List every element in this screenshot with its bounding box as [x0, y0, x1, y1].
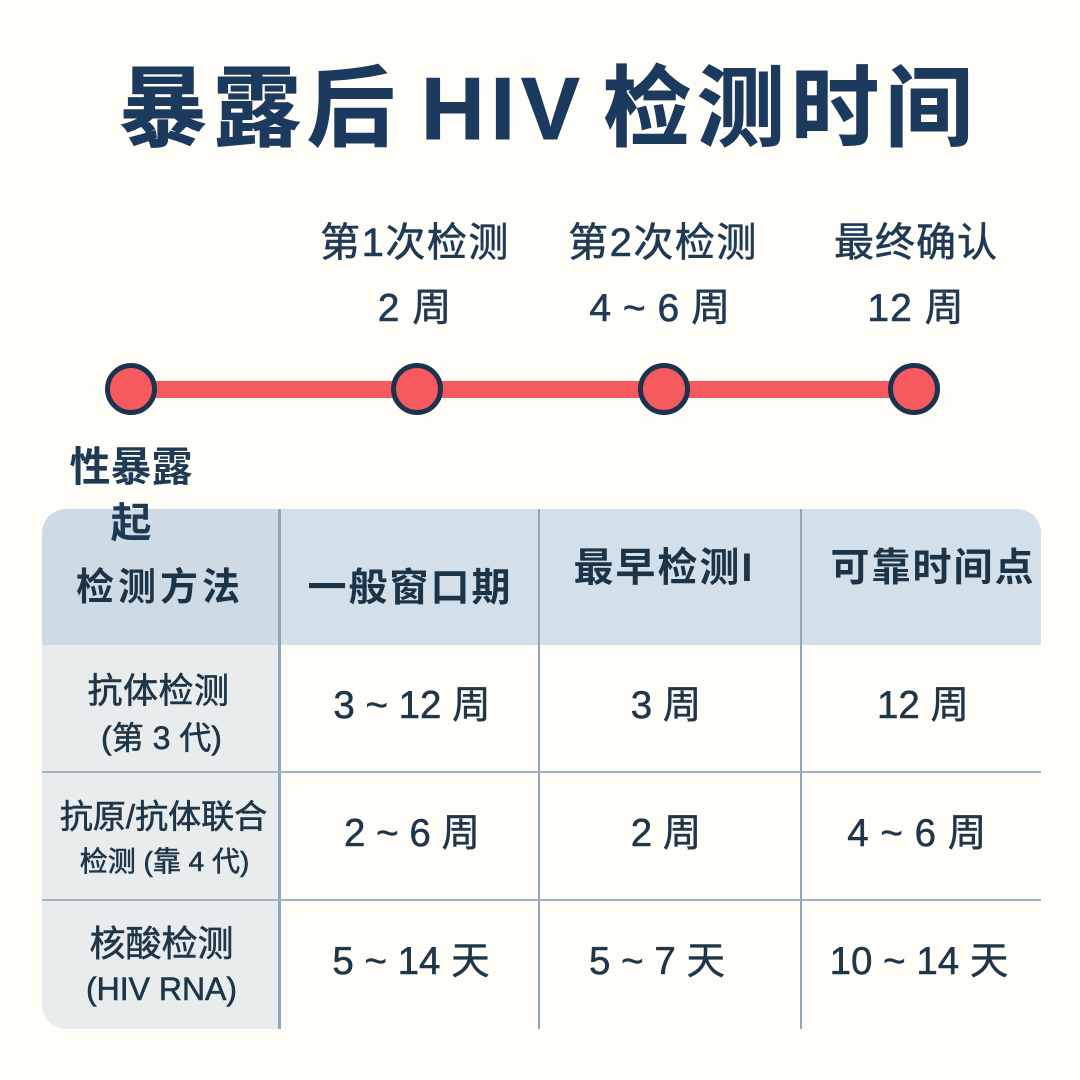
method label: 抗原/抗体联合	[60, 798, 267, 835]
timeline value: first test: 2 周	[378, 287, 452, 330]
timeline start label: 性暴露	[70, 444, 192, 490]
method sub label: (HIV RNA)	[86, 971, 237, 1007]
title part: testing time: 检测时间	[603, 59, 979, 158]
timeline node: 4-6 weeks	[638, 363, 690, 415]
header: general window period: 一般窗口期	[307, 567, 512, 610]
value: reliable: 4 ~ 6 周	[847, 812, 987, 855]
timeline node: 2 weeks	[391, 363, 443, 415]
table backgrounds	[42, 509, 1041, 1029]
timeline start label	[70, 444, 192, 546]
title part: exposure: 暴露后	[119, 59, 401, 158]
timeline node: exposure	[105, 363, 157, 415]
value: earliest: 2 周	[631, 812, 701, 855]
header: earliest detection: 最早检测I	[573, 546, 755, 590]
timeline value: second test: 4 ~ 6 周	[589, 287, 731, 330]
value: earliest: 5 ~ 7 天	[589, 940, 725, 983]
row: antigen antibody test	[60, 798, 987, 878]
timeline node: 12 weeks	[888, 363, 940, 415]
title	[119, 59, 979, 158]
row: nucleic acid test	[86, 923, 1008, 1007]
header: reliable time: 可靠时间点	[830, 547, 1036, 590]
timeline connector line	[130, 381, 920, 398]
value: window: 3 ~ 12 周	[333, 684, 491, 727]
header: method: 检测方法	[76, 567, 244, 609]
value: earliest: 3 周	[631, 684, 701, 727]
timeline label: first test: 第1次检测	[320, 221, 510, 265]
method label: 核酸检测	[89, 923, 234, 964]
value: reliable: 12 周	[877, 684, 969, 727]
timeline	[105, 221, 998, 415]
method sub label: 检测 (靠 4 代)	[80, 846, 249, 877]
table	[42, 509, 1041, 1029]
value: window: 2 ~ 6 周	[344, 812, 480, 855]
method label: 抗体检测	[87, 672, 230, 711]
row: antibody test	[87, 672, 969, 756]
value: window: 5 ~ 14 天	[332, 940, 490, 983]
method sub label: (第 3 代)	[101, 720, 222, 756]
timeline start label: 起	[110, 500, 152, 546]
title part: HIV: HIV	[421, 59, 586, 158]
timeline label: final confirmation: 最终确认	[834, 221, 998, 265]
value: reliable: 10 ~ 14 天	[830, 940, 1008, 983]
timeline value: final confirmation: 12 周	[867, 287, 965, 330]
timeline label: second test: 第2次检测	[568, 221, 758, 265]
